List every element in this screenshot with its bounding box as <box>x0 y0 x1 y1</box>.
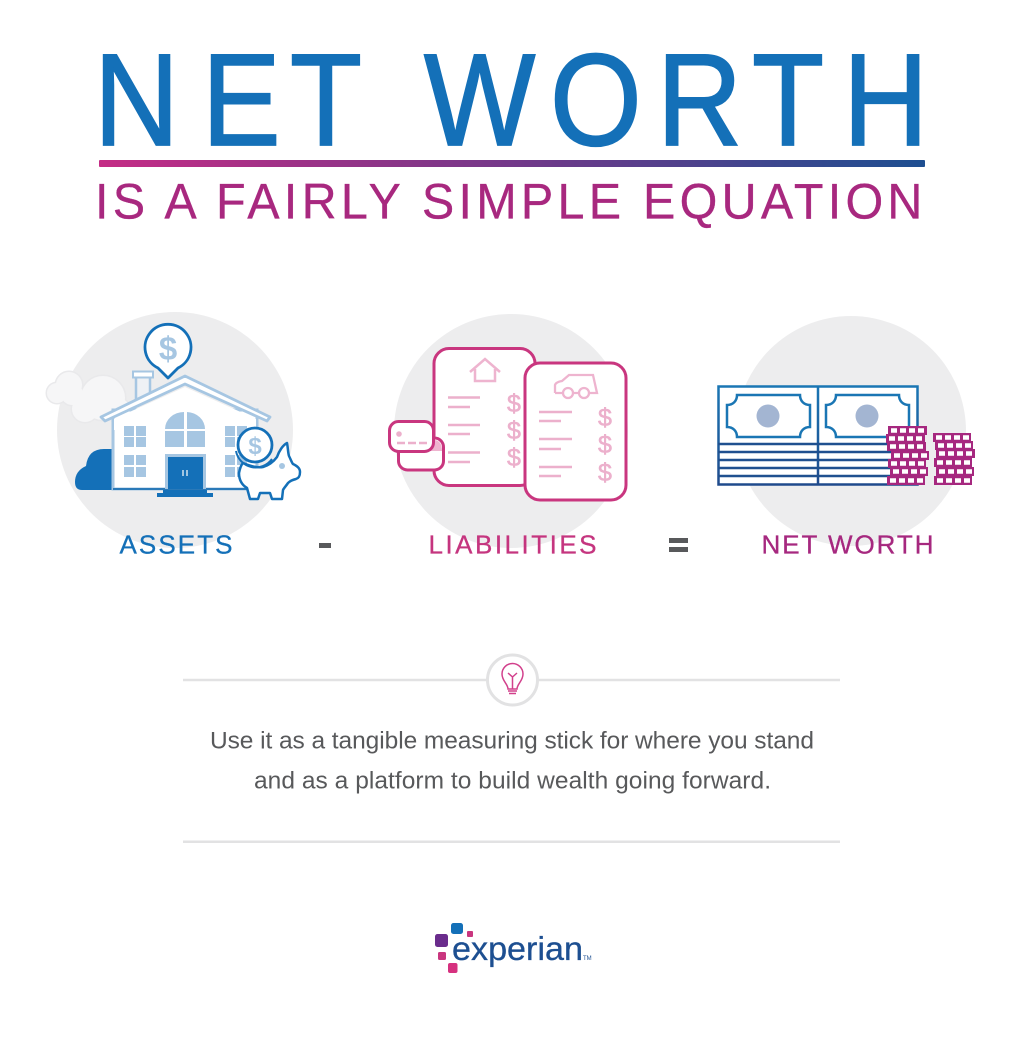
icon: stack of bills <box>718 386 918 485</box>
label: liabilities: LIABILITIES <box>428 530 596 560</box>
panel: liabilities <box>390 314 628 560</box>
icon: car loan document: $ <box>598 404 612 432</box>
text block: explanation <box>210 728 814 794</box>
icon: coin stacks <box>886 426 975 485</box>
label: net worth: NET WORTH <box>762 530 934 560</box>
icon: clouds <box>47 372 130 422</box>
icon: dollar bubble: $ <box>159 330 177 367</box>
icon: lightbulb <box>502 664 523 694</box>
assets background circle <box>57 312 293 548</box>
icon: car loan document <box>525 363 626 500</box>
panel: net worth <box>718 316 975 560</box>
icon: house loan document: $ <box>507 417 521 445</box>
title: NET WORTH <box>94 27 928 173</box>
icon: car loan document: $ <box>598 459 612 487</box>
net worth background circle <box>736 316 966 546</box>
icon: house loan document: $ <box>507 390 521 418</box>
icon: bush <box>75 449 113 490</box>
icon: house loan document <box>434 348 535 486</box>
liabilities background circle <box>394 314 628 548</box>
subtitle: IS A FAIRLY SIMPLE EQUATION <box>95 174 922 230</box>
icon: piggy bank <box>236 428 300 499</box>
label: assets: ASSETS <box>120 530 232 560</box>
icon: credit cards <box>390 422 444 470</box>
minus sign <box>319 543 331 548</box>
icon: dollar bubble <box>145 324 191 378</box>
logo: experian <box>435 923 592 973</box>
equals sign <box>669 538 688 552</box>
logo: experian: experian <box>452 930 583 967</box>
title rule <box>99 160 925 167</box>
text block: explanation: Use it as a tangible measuring stick for where you stand <box>210 728 814 754</box>
lower divider <box>183 840 840 843</box>
icon: car loan document: $ <box>598 431 612 459</box>
divider with lightbulb <box>183 655 840 705</box>
text block: explanation: and as a platform to build wealth going forward. <box>254 768 771 794</box>
panel: assets <box>47 312 300 560</box>
icon: piggy bank: $ <box>248 433 262 460</box>
icon: house loan document: $ <box>507 444 521 472</box>
icon: house <box>101 372 270 497</box>
logo: experian: TM <box>583 956 592 962</box>
